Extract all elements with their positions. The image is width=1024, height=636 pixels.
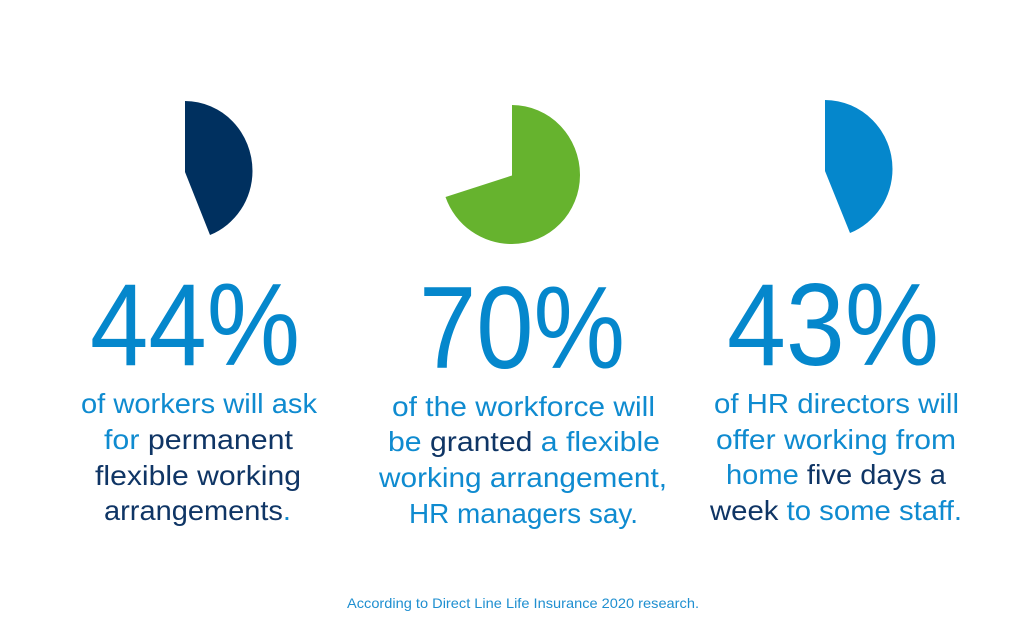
pie chart: 44% bbox=[185, 101, 252, 235]
text block: HR directors statement: of HR directors will bbox=[714, 388, 959, 419]
panel: 70% of the workforce: HR managers say. bbox=[409, 498, 638, 529]
footnote: source: According to Direct Line Life Insurance 2020 research. bbox=[347, 595, 699, 611]
pie chart: 70% bbox=[446, 105, 580, 244]
panel: 43% of HR directors: week to some staff. bbox=[709, 495, 962, 526]
big number: 44%: 44% bbox=[90, 259, 300, 390]
panel: 70% of the workforce bbox=[378, 105, 667, 529]
big number: 43%: 43% bbox=[727, 259, 939, 390]
panel: 43% of HR directors bbox=[709, 100, 962, 526]
panel: 44% of workers: flexible working bbox=[95, 460, 301, 491]
panel: 44% of workers: for permanent bbox=[104, 424, 293, 455]
panel: 44% of workers bbox=[81, 101, 318, 526]
text block: workforce statement: of the workforce will bbox=[392, 391, 655, 422]
text block: workers statement: of workers will ask bbox=[81, 388, 318, 419]
panel: 70% of the workforce: working arrangement, bbox=[378, 462, 667, 493]
panel: 70% of the workforce: be granted a flexible bbox=[388, 426, 660, 457]
panel: 43% of HR directors: offer working from bbox=[716, 424, 956, 455]
panel: 43% of HR directors: home five days a bbox=[726, 459, 946, 490]
pie chart: 43% bbox=[825, 100, 892, 233]
big number: 70%: 70% bbox=[419, 262, 625, 393]
panel: 44% of workers: arrangements. bbox=[104, 495, 291, 526]
